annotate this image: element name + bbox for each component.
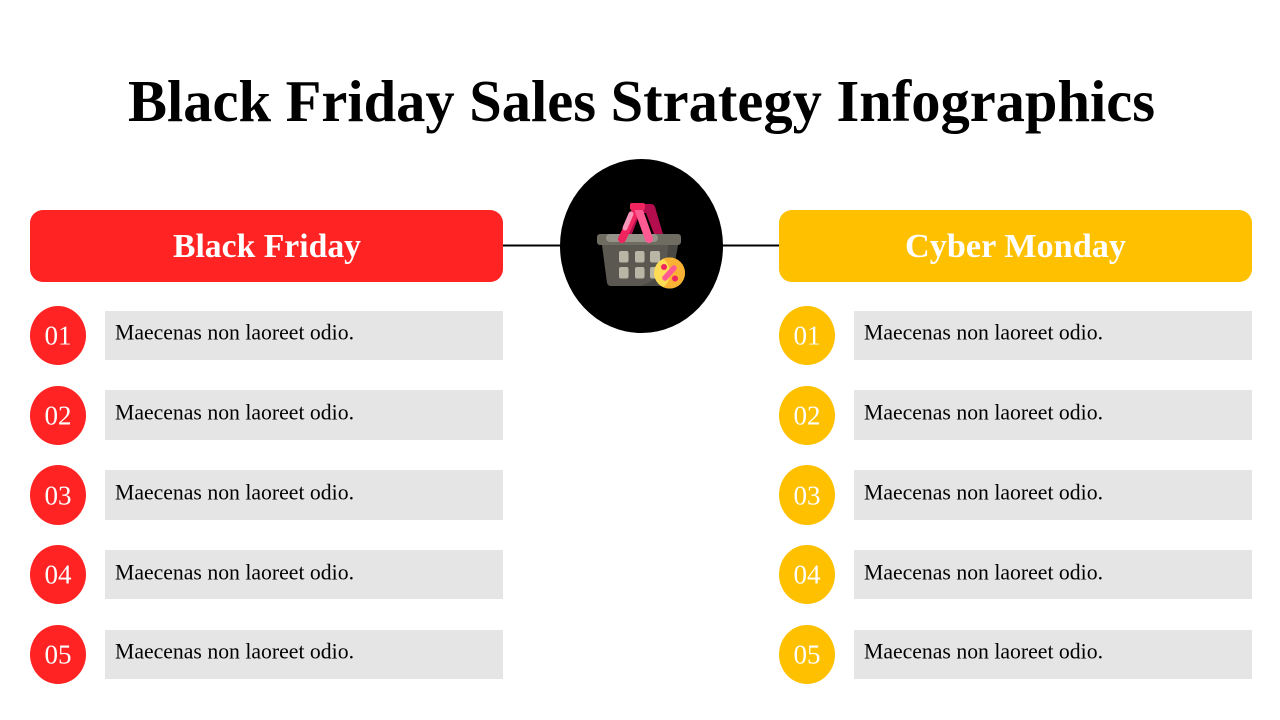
- list: Black Friday items: [30, 306, 503, 684]
- item 03: 03: [794, 480, 820, 510]
- header: Black Friday: [30, 210, 503, 282]
- item 02: Maecenas non laoreet odio.: [115, 400, 354, 424]
- item 02: [779, 386, 1252, 445]
- item 05: 05: [794, 640, 820, 670]
- item 05: 05: [44, 640, 72, 670]
- item 01: 01: [44, 320, 72, 350]
- item 03: [779, 465, 1252, 525]
- list: Cyber Monday items: [779, 306, 1252, 684]
- item 04: 04: [794, 560, 821, 590]
- item 01: [30, 306, 503, 365]
- item 03: Maecenas non laoreet odio.: [115, 480, 354, 504]
- item 04: Maecenas non laoreet odio.: [864, 560, 1103, 584]
- item 03: Maecenas non laoreet odio.: [864, 480, 1103, 504]
- item 02: 02: [794, 400, 820, 430]
- header: Black Friday: Black Friday: [173, 228, 361, 265]
- item 04: [779, 545, 1252, 604]
- item 02: [30, 386, 503, 445]
- icon: shopping basket with percent badge: [560, 159, 723, 333]
- header: Cyber Monday: [779, 210, 1252, 282]
- item 05: [779, 625, 1252, 684]
- item 02: Maecenas non laoreet odio.: [864, 400, 1103, 424]
- header: Cyber Monday: Cyber Monday: [905, 228, 1126, 265]
- item 01: [779, 306, 1252, 365]
- item 01: Maecenas non laoreet odio.: [115, 320, 354, 344]
- item 05: Maecenas non laoreet odio.: [115, 638, 354, 664]
- item 01: Maecenas non laoreet odio.: [864, 320, 1103, 344]
- item 05: [30, 625, 503, 684]
- item 02: 02: [44, 400, 72, 430]
- item 04: [30, 545, 503, 604]
- item 03: [30, 465, 503, 525]
- item 04: Maecenas non laoreet odio.: [115, 560, 354, 584]
- item 01: 01: [794, 320, 820, 350]
- title: Black Friday Sales Strategy Infographics: [128, 68, 1155, 134]
- item 03: 03: [44, 480, 72, 510]
- item 05: Maecenas non laoreet odio.: [864, 638, 1103, 664]
- item 04: 04: [44, 560, 72, 590]
